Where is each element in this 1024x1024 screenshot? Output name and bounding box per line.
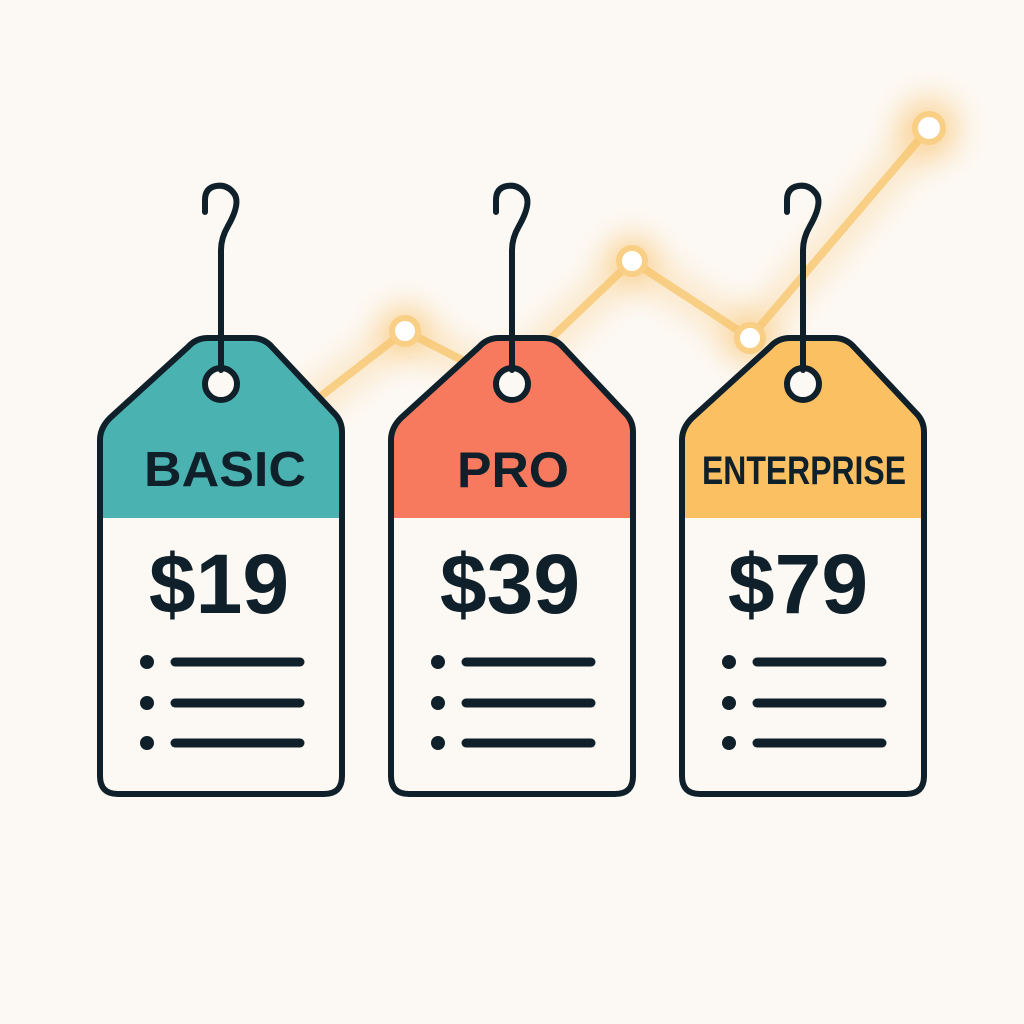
feature list	[175, 662, 300, 743]
label: ENTERPRISE: ENTERPRISE	[702, 449, 906, 493]
price: $79: $79	[728, 537, 868, 631]
label: BASIC: BASIC	[144, 443, 306, 497]
tag: pro	[391, 186, 633, 794]
tag: basic	[100, 186, 342, 794]
price: $39: $39	[440, 537, 580, 631]
feature list	[466, 662, 591, 743]
tag: enterprise	[682, 186, 924, 794]
feature list	[757, 662, 882, 743]
price: $19: $19	[149, 537, 289, 631]
label: PRO: PRO	[457, 442, 569, 498]
trend line chart	[290, 98, 959, 420]
